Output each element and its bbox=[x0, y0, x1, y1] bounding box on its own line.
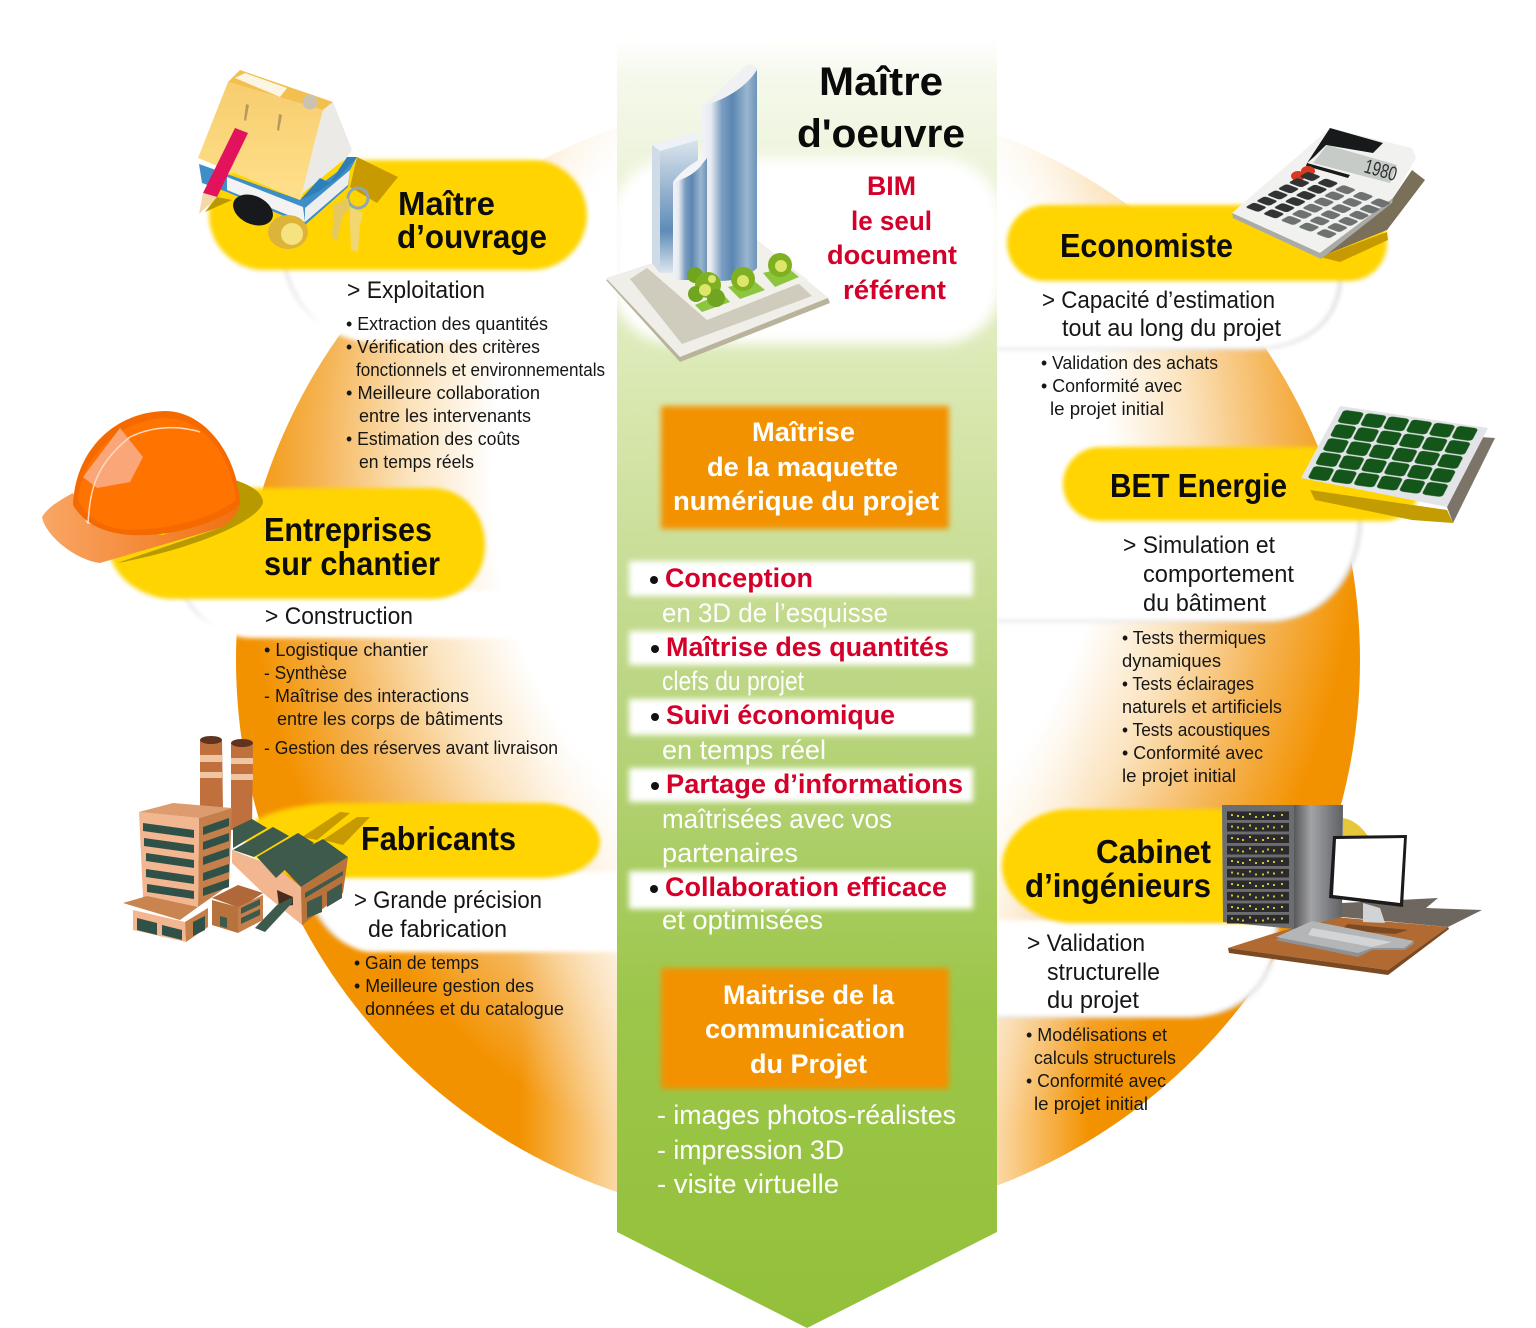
text block: entreprises details: - Maîtrise des interactions bbox=[264, 686, 469, 706]
list: BIM benefits with white highlight strips: Conception bbox=[665, 563, 813, 593]
text block: maître d'ouvrage details: entre les intervenants bbox=[359, 406, 531, 426]
text block: BET energie details: le projet initial bbox=[1122, 766, 1236, 786]
text block: fabricants details bbox=[354, 887, 564, 1019]
text block: cabinet details: structurelle bbox=[1047, 959, 1160, 986]
list: BIM benefits with white highlight strips: Suivi économique bbox=[666, 700, 895, 730]
panel: maître d'ouvrage: d’ouvrage bbox=[397, 218, 547, 255]
panel: fabricants bbox=[123, 736, 600, 942]
text block: maître d'ouvrage details: • Estimation des coûts bbox=[346, 429, 520, 449]
text block: BET energie details: > Simulation et bbox=[1123, 532, 1275, 559]
panel: maître d'ouvrage: Maître bbox=[398, 185, 495, 222]
title: maître d'oeuvre: Maître bbox=[819, 60, 943, 104]
list: communication outputs: - images photos-réalistes bbox=[657, 1100, 956, 1130]
callout: BIM le seul document référent: référent bbox=[843, 275, 946, 305]
panel: economiste: Economiste bbox=[1060, 227, 1233, 264]
text block: BET energie details: dynamiques bbox=[1122, 651, 1221, 671]
text block: BET energie details: naturels et artificiels bbox=[1122, 697, 1282, 717]
text block: maître d'ouvrage details: • Extraction des quantités bbox=[346, 314, 548, 334]
list: BIM benefits with white highlight strips: Partage d’informations bbox=[666, 769, 963, 799]
title: maître d'oeuvre bbox=[797, 60, 965, 156]
list: communication outputs: - visite virtuelle bbox=[657, 1169, 839, 1199]
list: BIM benefits with white highlight strips: Collaboration efficace bbox=[665, 872, 947, 902]
panel: economiste bbox=[1007, 128, 1425, 281]
orange box: maitrise de la communication bbox=[661, 968, 949, 1089]
icon: solar panel bbox=[1301, 406, 1495, 523]
text block: BET energie details: • Tests thermiques bbox=[1122, 628, 1266, 648]
text block: BET energie details: • Conformité avec bbox=[1122, 743, 1263, 763]
text block: entreprises details: - Gestion des réserves avant livraison bbox=[264, 738, 558, 758]
icon: orange hard hat bbox=[42, 411, 240, 563]
panel: entreprises sur chantier: sur chantier bbox=[264, 545, 440, 582]
text block: entreprises details: • Logistique chantier bbox=[264, 640, 428, 660]
text block: economiste details: le projet initial bbox=[1050, 399, 1164, 419]
orange box: maitrise de la communication: communication bbox=[705, 1014, 905, 1044]
text block: economiste details: tout au long du projet bbox=[1062, 315, 1281, 342]
text block: fabricants details: • Gain de temps bbox=[354, 953, 479, 973]
callout: BIM le seul document référent: le seul bbox=[851, 206, 932, 236]
text block: entreprises details: entre les corps de bâtiments bbox=[277, 709, 503, 729]
list: BIM benefits with white highlight strips: partenaires bbox=[662, 838, 798, 868]
text block: fabricants details: • Meilleure gestion des bbox=[354, 976, 534, 996]
panel: BET energie: BET Energie bbox=[1110, 467, 1287, 504]
panel: entreprises sur chantier: Entreprises bbox=[264, 511, 432, 548]
list: BIM benefits with white highlight strips: Maîtrise des quantités bbox=[666, 632, 949, 662]
text block: economiste details: • Conformité avec bbox=[1041, 376, 1182, 396]
list: BIM benefits with white highlight strips: maîtrisées avec vos bbox=[662, 804, 892, 834]
text block: maître d'ouvrage details: • Meilleure collaboration bbox=[346, 383, 540, 403]
panel: cabinet d'ingénieurs bbox=[1002, 805, 1482, 975]
callout: BIM le seul document référent bbox=[827, 171, 957, 305]
icon: factory bbox=[123, 736, 348, 942]
text block: maître d'ouvrage details: fonctionnels et environnementals bbox=[356, 360, 605, 380]
orange box: maîtrise de la maquette: de la maquette bbox=[707, 452, 898, 482]
title: maître d'oeuvre: d'oeuvre bbox=[797, 112, 965, 156]
text block: cabinet details: du projet bbox=[1047, 987, 1139, 1014]
text block: BET energie details bbox=[1122, 532, 1294, 786]
text block: economiste details: • Validation des achats bbox=[1041, 353, 1218, 373]
list: BIM benefits with white highlight strips: en 3D de l’esquisse bbox=[662, 598, 888, 628]
panel: cabinet d'ingénieurs: d’ingénieurs bbox=[1025, 867, 1211, 904]
text block: cabinet details: > Validation bbox=[1027, 930, 1145, 957]
text block: entreprises details bbox=[264, 603, 558, 758]
orange box: maitrise de la communication: du Projet bbox=[750, 1049, 867, 1079]
text block: fabricants details: de fabrication bbox=[368, 916, 507, 943]
panel: cabinet d'ingénieurs: Cabinet bbox=[1096, 833, 1211, 870]
list: BIM benefits with white highlight strips: clefs du projet bbox=[662, 666, 804, 696]
panel: BET energie bbox=[1063, 406, 1495, 523]
text block: cabinet details: • Conformité avec bbox=[1026, 1071, 1166, 1091]
text block: cabinet details: calculs structurels bbox=[1034, 1048, 1176, 1068]
callout: BIM le seul document référent: BIM bbox=[867, 171, 916, 201]
text block: BET energie details: • Tests acoustiques bbox=[1122, 720, 1270, 740]
panel: entreprises sur chantier bbox=[42, 411, 485, 599]
list: BIM benefits with white highlight strips: en temps réel bbox=[662, 735, 826, 765]
orange box: maîtrise de la maquette: Maîtrise bbox=[752, 417, 855, 447]
icon: office towers on a plot bbox=[606, 65, 830, 362]
text block: economiste details bbox=[1041, 287, 1281, 419]
list: BIM benefits with white highlight strips bbox=[629, 561, 973, 935]
white cloud blobs behind the actor descriptions bbox=[180, 250, 1362, 1018]
orange box: maîtrise de la maquette bbox=[661, 406, 949, 529]
icon: calculator: 1980 bbox=[1362, 156, 1399, 186]
text block: maître d'ouvrage details bbox=[346, 277, 605, 472]
text block: fabricants details: données et du catalogue bbox=[365, 999, 564, 1019]
list: communication outputs: - impression 3D bbox=[657, 1135, 844, 1165]
text block: economiste details: > Capacité d’estimation bbox=[1042, 287, 1275, 314]
text block: fabricants details: > Grande précision bbox=[354, 887, 542, 914]
text block: entreprises details: - Synthèse bbox=[264, 663, 347, 683]
text block: BET energie details: du bâtiment bbox=[1143, 590, 1266, 617]
text block: maître d'ouvrage details: en temps réels bbox=[359, 452, 474, 472]
text block: cabinet details bbox=[1026, 930, 1176, 1114]
text block: maître d'ouvrage details: > Exploitation bbox=[347, 277, 485, 304]
text block: BET energie details: comportement bbox=[1143, 561, 1294, 588]
list: BIM benefits with white highlight strips: et optimisées bbox=[662, 905, 823, 935]
text block: entreprises details: > Construction bbox=[265, 603, 413, 630]
icon: binder, pencil, stamp and keys bbox=[198, 70, 368, 252]
icon: calculator bbox=[1232, 128, 1425, 262]
list: communication outputs bbox=[657, 1100, 956, 1199]
panel: central green arrow band bbox=[612, 38, 1002, 1328]
background circle: orange gradient disc bbox=[236, 98, 1360, 1222]
orange box: maîtrise de la maquette: numérique du projet bbox=[673, 486, 939, 516]
panel: maître d'ouvrage bbox=[198, 70, 587, 270]
icon: server and computer bbox=[1222, 805, 1482, 975]
text block: maître d'ouvrage details: • Vérification des critères bbox=[346, 337, 540, 357]
text block: cabinet details: le projet initial bbox=[1034, 1094, 1148, 1114]
text block: cabinet details: • Modélisations et bbox=[1026, 1025, 1167, 1045]
panel: fabricants: Fabricants bbox=[361, 820, 516, 857]
text block: BET energie details: • Tests éclairages bbox=[1122, 674, 1254, 694]
orange box: maitrise de la communication: Maitrise de la bbox=[723, 980, 895, 1010]
callout: BIM le seul document référent: document bbox=[827, 240, 957, 270]
